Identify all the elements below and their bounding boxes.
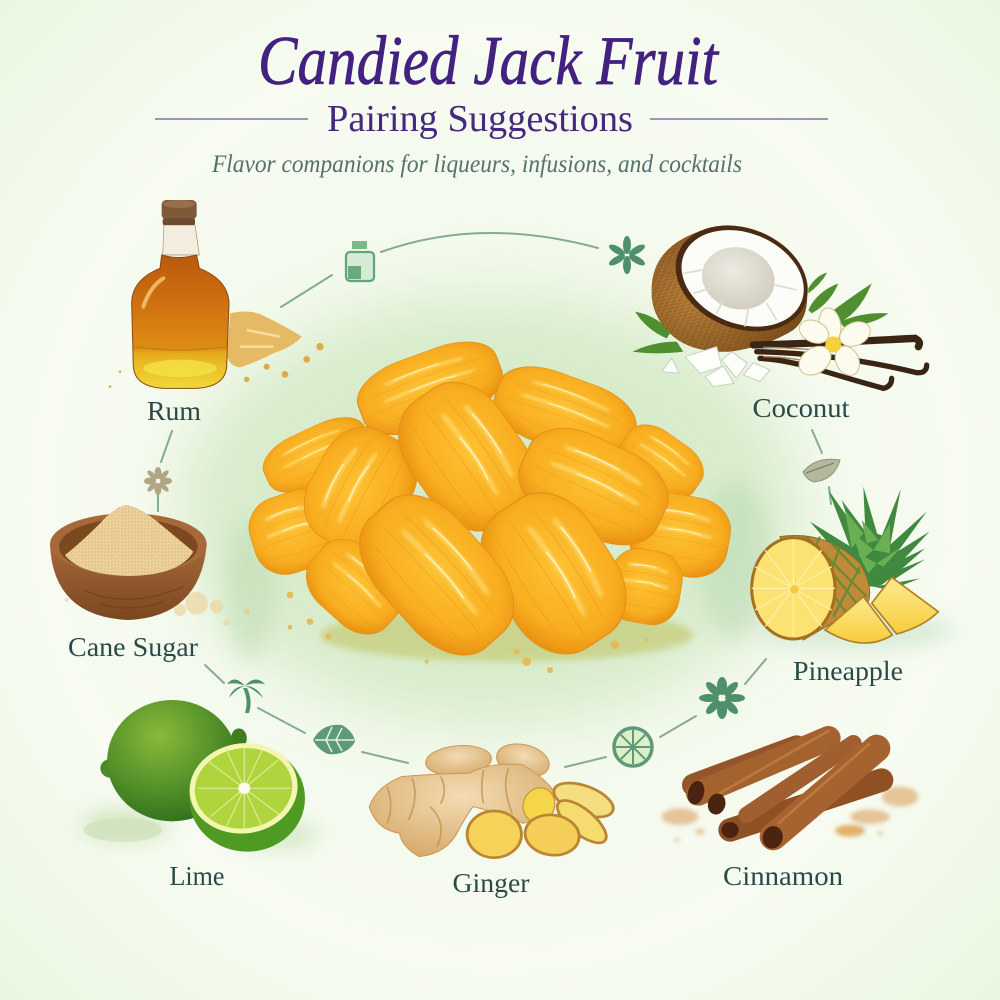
- ingredient: ginger: [369, 739, 618, 898]
- ingredient: lime: [84, 700, 307, 891]
- title: Candied Jack Fruit: [258, 23, 719, 100]
- ingredient: cinnamon: [662, 730, 918, 891]
- icon: green flower: [699, 677, 745, 719]
- connector arcs: [158, 233, 831, 767]
- icon: star flower: [607, 236, 647, 274]
- ingredient: rum: [109, 200, 324, 426]
- icon: citrus slice: [614, 728, 652, 766]
- rum bottle and sugar: [109, 200, 324, 388]
- ingredient: coconut: [633, 206, 927, 423]
- icon: palm tree: [227, 679, 265, 713]
- coconut, flower and vanilla: [633, 206, 927, 388]
- icon: monstera leaf: [313, 725, 355, 754]
- label: lime: Lime: [170, 861, 225, 891]
- label: coconut: Coconut: [752, 393, 850, 423]
- icon: small blossom: [144, 467, 172, 495]
- label: pineapple: Pineapple: [793, 656, 903, 686]
- label: ginger: Ginger: [452, 868, 530, 898]
- cinnamon sticks and powder: [662, 730, 918, 851]
- icon: bottle: [346, 241, 374, 281]
- wooden bowl with sugar: [50, 505, 250, 626]
- whole and halved lime: [84, 700, 307, 852]
- ginger root and slices: [369, 739, 618, 859]
- label: rum: Rum: [147, 396, 201, 426]
- tagline: Flavor companions for liqueurs, infusions, and cocktails: [211, 151, 742, 178]
- ingredient: pineapple: [752, 487, 938, 686]
- label: cane sugar: Cane Sugar: [68, 632, 198, 662]
- label: cinnamon: Cinnamon: [723, 861, 844, 891]
- icon: leaf: [803, 459, 840, 482]
- subtitle: Pairing Suggestions: [327, 98, 633, 140]
- ingredient: cane sugar: [50, 505, 250, 662]
- central candied jackfruit pile: [241, 329, 736, 675]
- pineapple fruit and crown: [752, 487, 938, 643]
